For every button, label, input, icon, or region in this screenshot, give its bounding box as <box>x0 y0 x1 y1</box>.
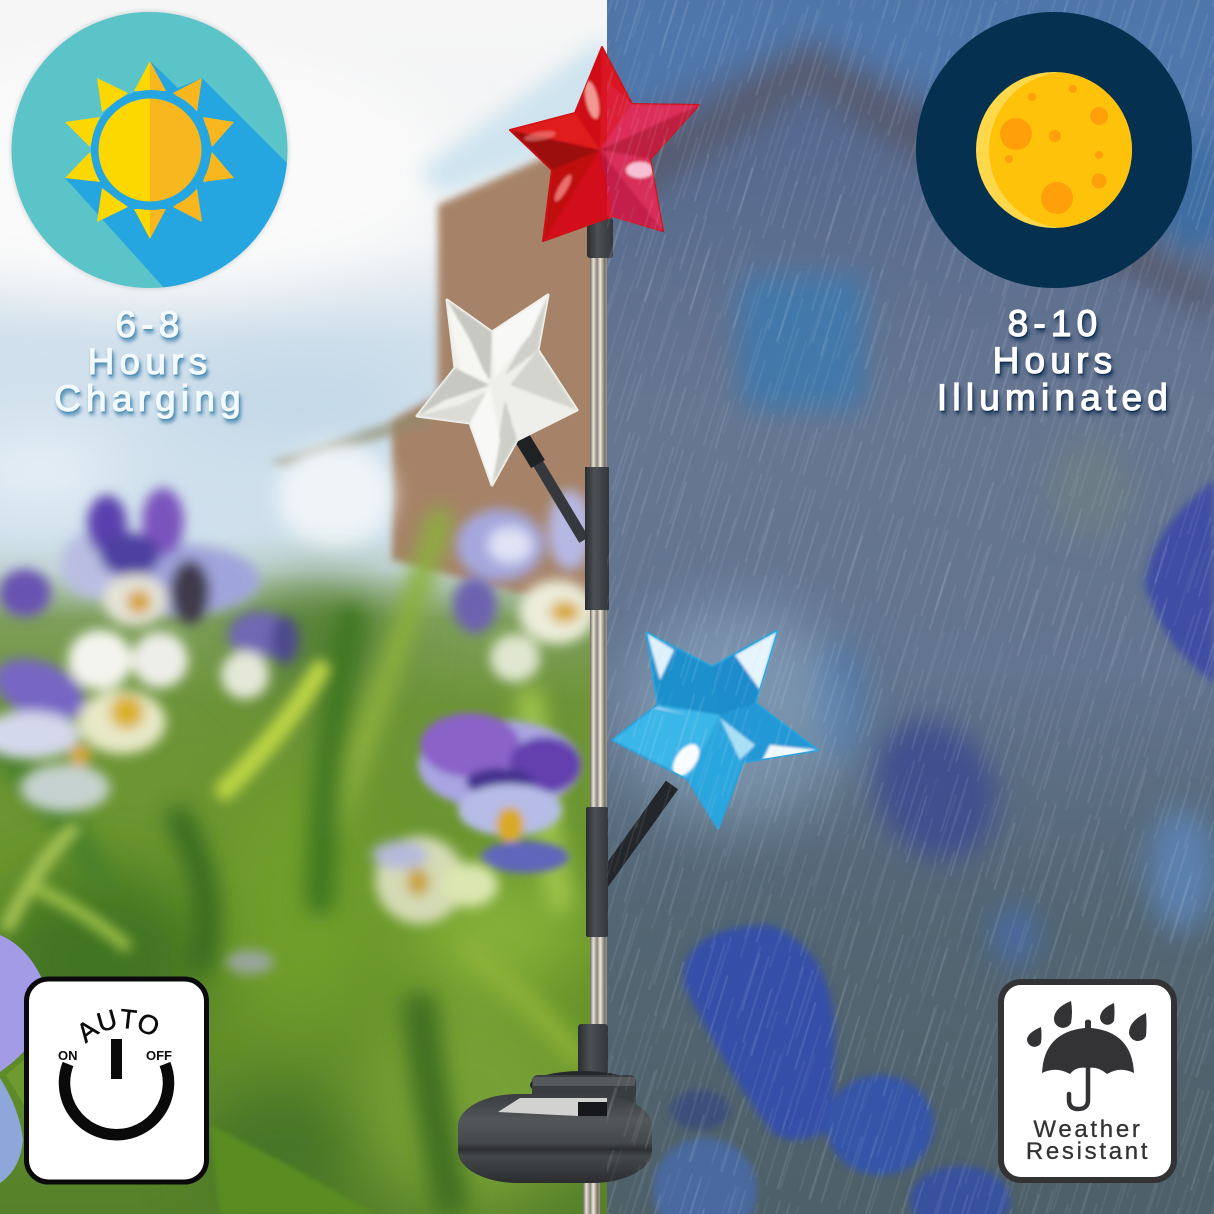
steel stem <box>583 255 607 1214</box>
badge: weather resistant: Resistant <box>1026 1138 1150 1165</box>
grass blades <box>0 520 580 1200</box>
sharper bright blades <box>8 670 320 945</box>
blue petals <box>653 480 1214 1214</box>
caption: charging time: 6-8 <box>115 304 185 345</box>
icon: white star <box>417 295 577 485</box>
caption: charging time: Charging <box>54 378 246 419</box>
pale gap beside building <box>277 443 393 547</box>
icon: moon badge <box>916 12 1192 288</box>
umbrella <box>1042 1020 1134 1109</box>
panel: night rain scene <box>607 0 1214 1214</box>
caption: illumination time: Illuminated <box>937 377 1173 418</box>
curved auto label: AUTO <box>80 1008 158 1044</box>
sun ring and disc <box>91 90 211 210</box>
badge: weather resistant <box>1001 982 1174 1180</box>
switch labels: ON <box>58 1048 78 1063</box>
caption: charging time <box>54 304 246 426</box>
blurred blue flowers <box>812 440 1214 965</box>
caption: illumination time <box>937 303 1173 418</box>
blue star arm <box>598 785 672 888</box>
product: solar stake <box>458 218 672 1214</box>
bright leaf <box>210 1125 375 1214</box>
caption: illumination time: 8-10 <box>1008 303 1102 344</box>
sun long shadow <box>65 61 287 288</box>
flower cluster top left <box>0 488 299 812</box>
icon: red star <box>510 47 699 241</box>
caption: illumination time: Hours <box>993 340 1117 381</box>
label: Weather <box>1033 1116 1143 1143</box>
icon: sun badge <box>10 11 300 300</box>
grass mass <box>0 590 580 1210</box>
sky clouds <box>0 149 384 518</box>
power symbol <box>64 1039 169 1135</box>
flower cluster top right <box>453 490 595 682</box>
rain overlay <box>607 0 1214 1214</box>
moon craters <box>1000 85 1108 214</box>
white star arm <box>510 418 584 540</box>
glow behind blue star <box>615 605 855 825</box>
rubber sleeves <box>578 218 613 1086</box>
icon: blue star <box>613 631 817 828</box>
sun rays <box>65 61 234 239</box>
building <box>270 155 590 600</box>
pale flower <box>226 836 498 974</box>
rain drops <box>1027 1001 1146 1047</box>
blue roof haze <box>420 40 620 195</box>
switch labels: OFF <box>146 1048 172 1063</box>
badge: auto on off switch <box>1 939 209 1184</box>
panel: daytime garden scene <box>0 0 620 1214</box>
solar base <box>458 1071 652 1183</box>
house silhouette <box>607 0 1214 410</box>
caption: charging time: Hours <box>88 341 212 382</box>
switch labels <box>58 1048 172 1063</box>
foreground petals <box>0 935 42 1183</box>
flower centre right <box>418 713 582 873</box>
